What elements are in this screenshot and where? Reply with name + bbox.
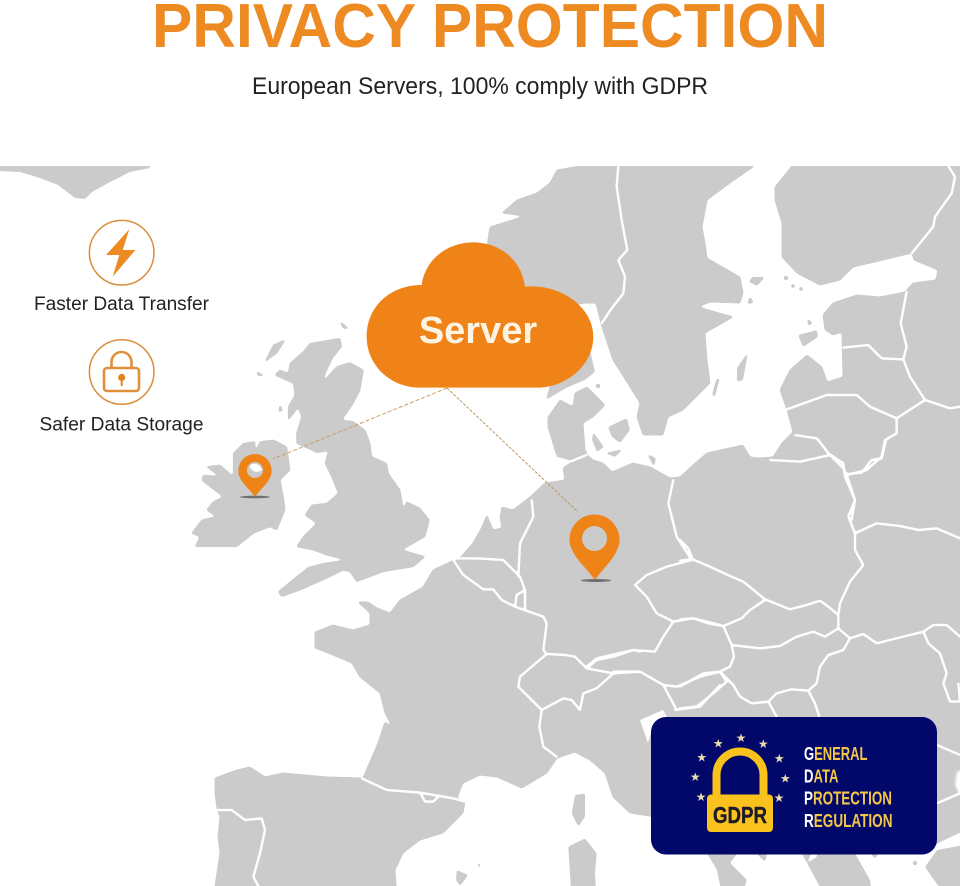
national borders: north and Baltic — [558, 166, 960, 520]
label: safer data storage: Safer Data Storage — [40, 414, 204, 436]
icon: EU star ring: ★ — [736, 731, 746, 745]
icon: lightning bolt — [89, 220, 154, 285]
icon: EU star ring: ★ — [713, 736, 724, 750]
icon: EU star ring: ★ — [758, 737, 769, 751]
icon: EU star ring: ★ — [696, 790, 706, 804]
text: general data protection regulation: REGULATION — [804, 811, 892, 831]
national borders: central and eastern Europe — [680, 440, 960, 803]
icon: EU star ring: ★ — [774, 791, 784, 805]
label: faster data transfer: Faster Data Transfer — [34, 294, 210, 315]
icon: EU star ring: ★ — [690, 770, 701, 784]
cloud: server: Server — [419, 310, 537, 352]
national borders: western Europe — [217, 500, 640, 886]
icon: GDPR padlock: GDPR — [713, 802, 767, 828]
icon: padlock — [89, 340, 154, 404]
GDPR badge — [651, 717, 937, 854]
text: general data protection regulation: PROTECTION — [804, 788, 892, 808]
national borders: Alps and Adriatic — [587, 480, 720, 710]
icon: EU star ring: ★ — [696, 750, 707, 764]
connection line: cloud to Ireland — [273, 388, 447, 459]
icon: EU star ring — [690, 731, 791, 805]
text: general data protection regulation: GENERAL — [804, 744, 868, 764]
text: general data protection regulation — [804, 744, 892, 831]
sea cut-out: Black Sea — [955, 765, 960, 795]
feature: faster data transfer — [34, 220, 210, 315]
landmass: Denmark — [548, 387, 605, 460]
feature: safer data storage — [40, 340, 204, 436]
islands: Corsica, Sardinia, Balearics — [456, 793, 597, 886]
cloud: server — [367, 242, 593, 388]
subtitle: European Servers, 100% comply with GDPR — [252, 73, 708, 100]
landmass: continental Europe — [213, 150, 960, 886]
icon: EU star ring: ★ — [780, 772, 791, 786]
landmass: Great Britain and Ireland — [192, 322, 429, 597]
pin: Ireland — [238, 454, 272, 498]
connection line: cloud to Germany — [447, 388, 578, 512]
icon: GDPR padlock — [707, 751, 773, 832]
landmass: Scandinavia — [480, 150, 753, 435]
text: general data protection regulation: DATA — [804, 767, 838, 787]
landmass: Greece and Turkey fragments — [705, 843, 960, 886]
icon: EU star ring: ★ — [774, 752, 785, 766]
pin: Germany — [570, 514, 620, 582]
islands: Baltic and Danish — [592, 276, 818, 467]
landmass: Norway tip below cloud — [546, 350, 595, 400]
national borders — [217, 166, 960, 886]
sea cut-out: Adriatic — [640, 710, 667, 743]
landmass: Iceland fragment — [0, 150, 152, 199]
